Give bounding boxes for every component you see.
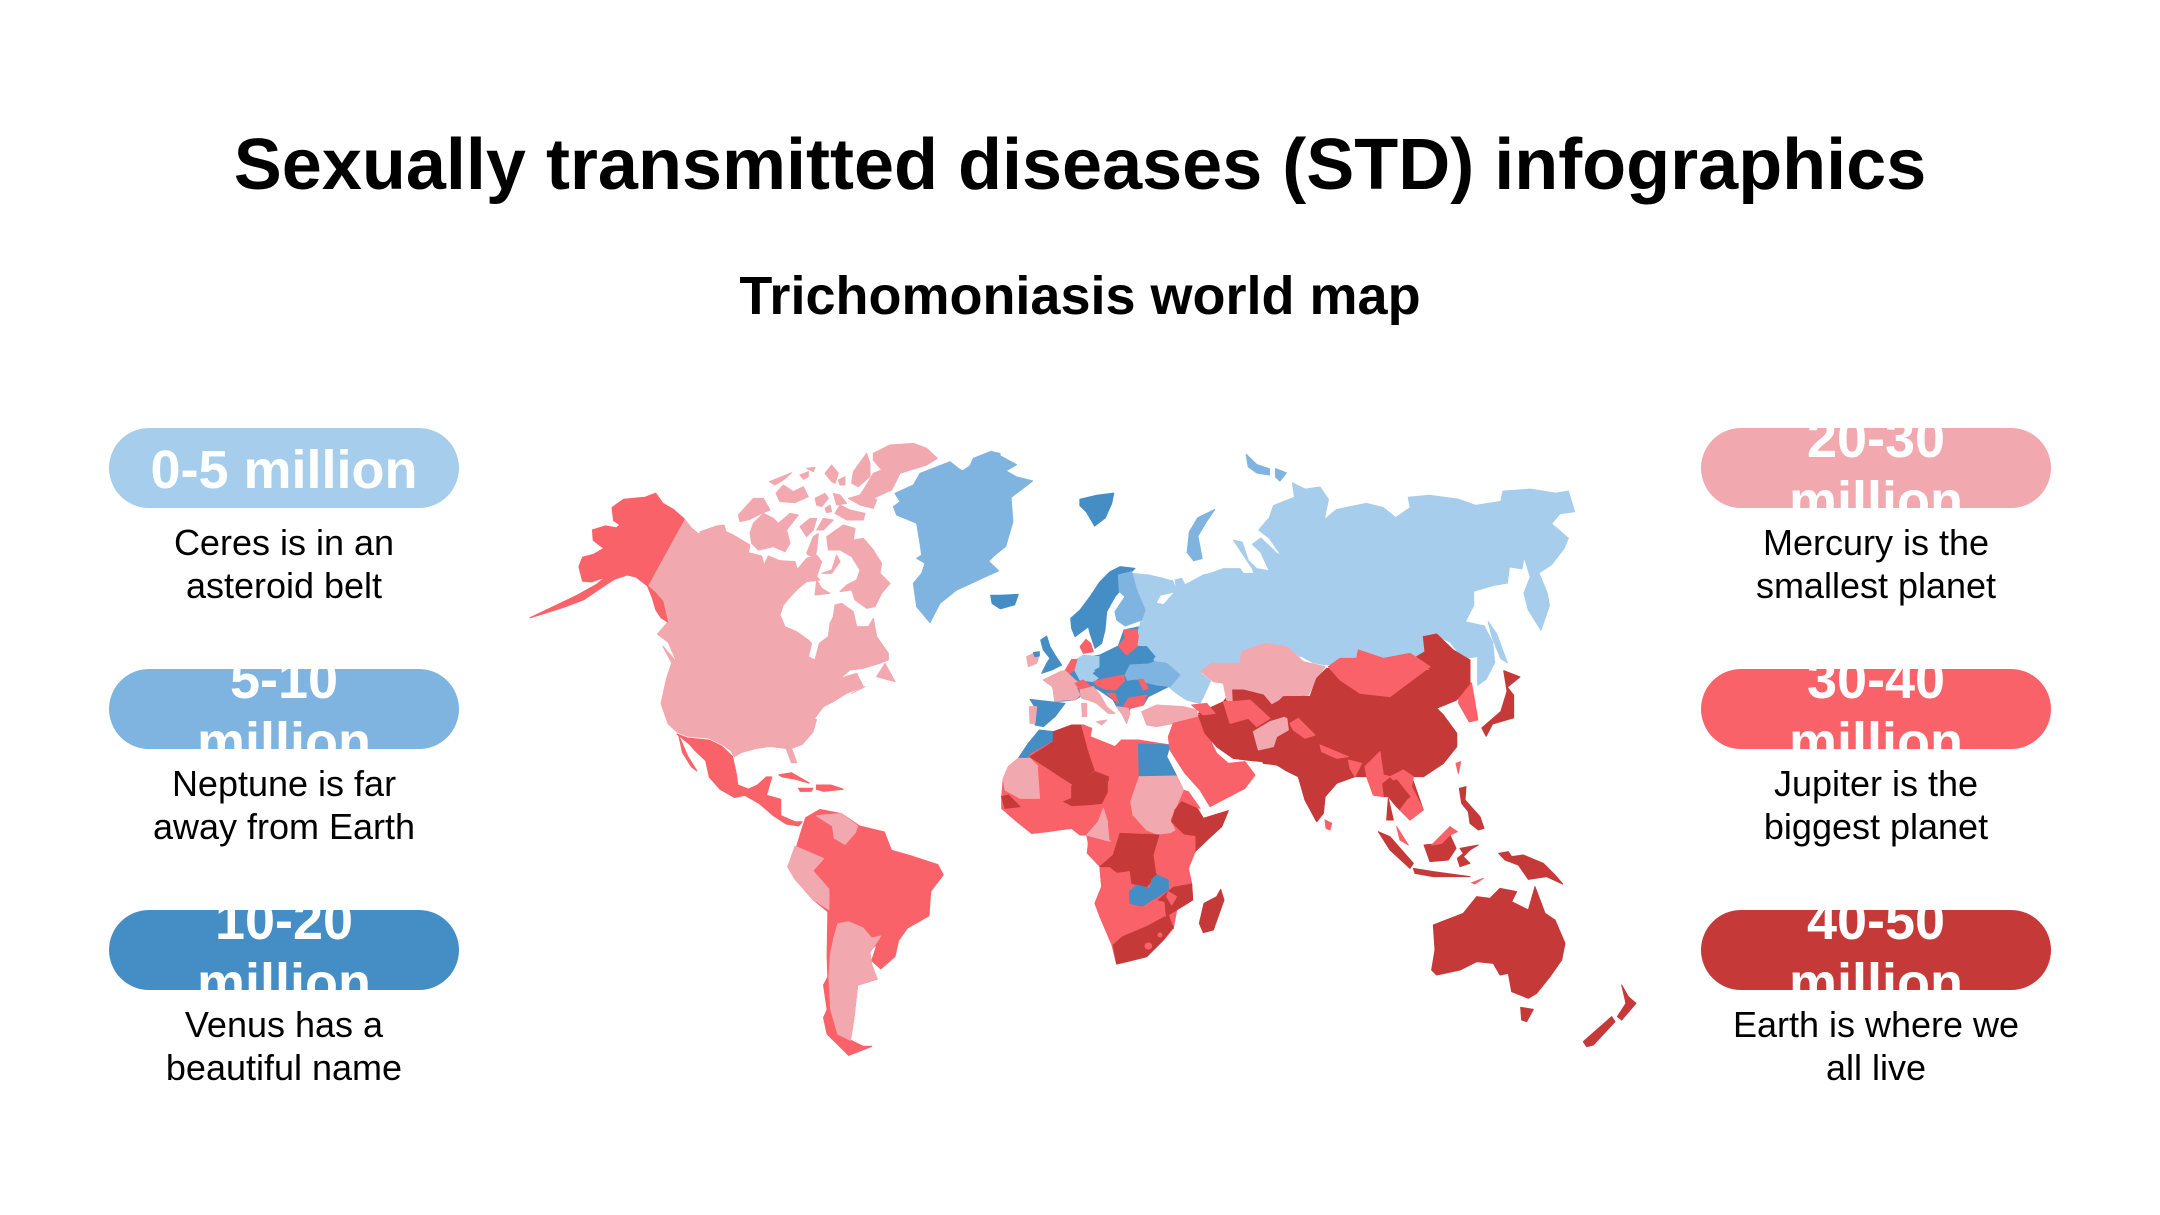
legend item: 40-50 million: all live <box>1826 1047 1926 1088</box>
legend item: 20-30 million: smallest planet <box>1756 565 1996 606</box>
map: land underlay for Africa, Asia and Europe <box>1002 627 1457 964</box>
legend item: 40-50 million: Earth is where we <box>1733 1004 2019 1045</box>
legend item: 10-20 million: beautiful name <box>166 1047 402 1088</box>
legend item: 40-50 million <box>1701 910 2051 1088</box>
map: Central, South and East Asia <box>1201 634 1470 877</box>
map: Maritime Southeast Asia and Oceania <box>1424 787 1636 1047</box>
map: Europe, North Africa and Middle East <box>1003 567 1300 807</box>
legend item: 10-20 million <box>109 910 459 1088</box>
map: western North America, Latin America and eastern Greenland <box>530 451 1032 1055</box>
legend item: 30-40 million <box>1701 669 2051 847</box>
legend item: 30-40 million: biggest planet <box>1764 806 1988 847</box>
legend item: 10-20 million: Venus has a <box>185 1004 383 1045</box>
legend item: 30-40 million: Jupiter is the <box>1774 763 1978 804</box>
legend item: 5-10 million: away from Earth <box>153 806 415 847</box>
legend item: 0-5 million: Ceres is in an <box>174 522 394 563</box>
map: Sub-Saharan Africa <box>1002 776 1228 964</box>
legend item: 5-10 million: Neptune is far <box>172 763 396 804</box>
legend item: 0-5 million <box>109 428 459 606</box>
legend item: 20-30 million <box>1701 428 2051 606</box>
map: Russia, Arctic islands, Korea and Japan <box>1080 454 1575 736</box>
title: Sexually transmitted diseases (STD) infographics <box>234 125 1926 205</box>
legend item: 5-10 million <box>109 669 459 847</box>
legend item: 20-30 million: Mercury is the <box>1763 522 1989 563</box>
subtitle: Trichomoniasis world map <box>739 266 1421 326</box>
legend item: 0-5 million: 0-5 million <box>150 440 418 500</box>
legend item: 0-5 million: asteroid belt <box>186 565 382 606</box>
map: eastern Canada, Arctic islands and Greenland <box>700 443 1000 730</box>
